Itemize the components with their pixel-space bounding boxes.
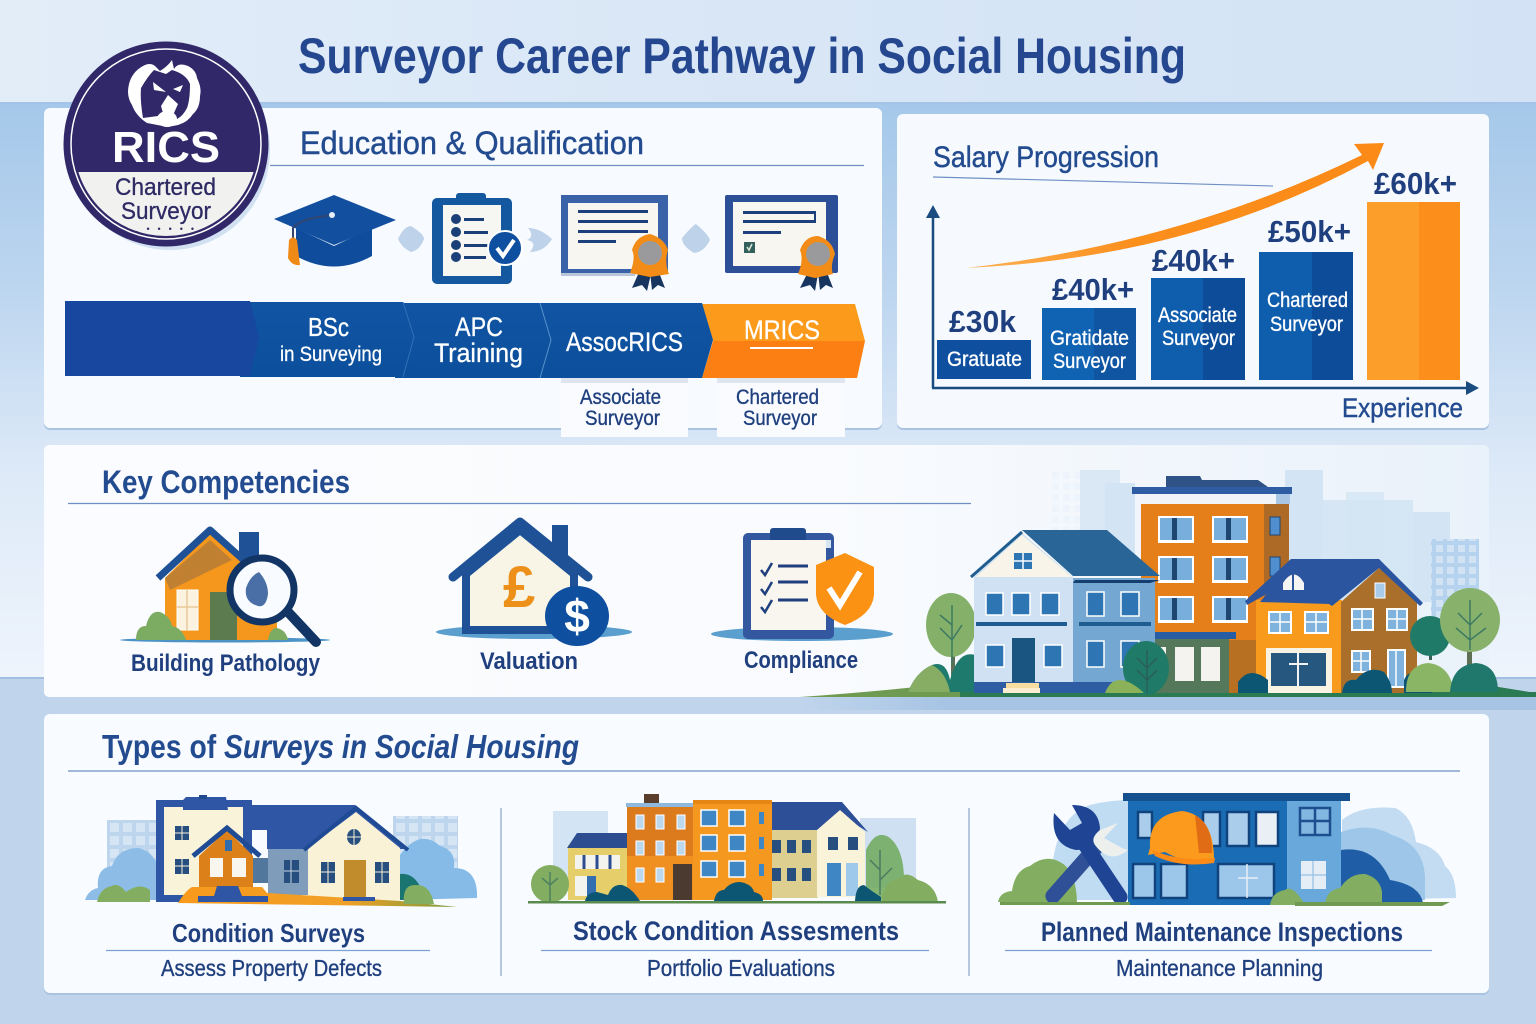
tag: chartered surveyor: Chartered: [736, 386, 819, 409]
badge name: RICS: [112, 123, 220, 172]
label: planned maintenance inspections: Planned Maintenance Inspections: [1041, 917, 1403, 947]
label: planned maintenance inspections: [1005, 917, 1432, 981]
scene: stock condition assessments: [528, 794, 946, 904]
bar: graduate surveyor: £40k+: [1052, 272, 1134, 307]
bar: graduate surveyor: [1042, 272, 1136, 380]
skyline: [1049, 470, 1479, 639]
label: condition surveys: Assess Property Defects: [161, 955, 382, 981]
tag: associate surveyor: Associate: [580, 386, 661, 409]
heading: types of surveys: Types of Surveys in Social Housing: [102, 728, 579, 765]
white and blue house: [971, 530, 1160, 693]
scene: planned maintenance inspections: [998, 793, 1456, 906]
icon: arrow 3: [682, 224, 710, 253]
step: APC training: APC: [455, 312, 503, 342]
panel: education and qualification: [44, 108, 882, 437]
axis label: Experience: [1342, 393, 1463, 423]
step: APC training: Training: [434, 338, 523, 368]
badge subtitle: [115, 174, 216, 234]
badge subtitle: Chartered: [115, 174, 216, 201]
icon: compliance: [711, 528, 893, 641]
step: BSc: BSc: [308, 312, 349, 342]
panel: types of surveys: [44, 714, 1489, 995]
bar: 60k: [1367, 166, 1460, 380]
label: stock condition assessments: [541, 916, 929, 981]
scene: condition surveys: [85, 795, 477, 907]
bar: graduate: £30k: [949, 304, 1017, 339]
step: BSc: [280, 312, 382, 366]
tag: associate surveyor: Surveyor: [585, 407, 660, 430]
RICS badge: [60, 42, 272, 262]
label: stock condition assessments: Portfolio Evaluations: [647, 955, 835, 981]
bar: chartered surveyor: [1259, 214, 1353, 380]
tower block: [1132, 476, 1292, 693]
step: MRICS: MRICS: [744, 315, 820, 345]
chart axes: [926, 205, 1479, 395]
label: planned maintenance inspections: Maintenance Planning: [1116, 955, 1323, 981]
bar: graduate surveyor: Surveyor: [1053, 350, 1126, 373]
icon: valuation: £: [503, 555, 535, 620]
bar: associate surveyor: [1151, 243, 1245, 380]
icon: associate certificate: [561, 195, 669, 291]
icon: lion head: [128, 60, 201, 127]
badge subtitle: . • • • • •: [136, 224, 194, 234]
growth arrow: [966, 143, 1384, 268]
tag: chartered surveyor: Surveyor: [743, 407, 817, 430]
step: AssocRICS: AssocRICS: [566, 327, 683, 357]
tree: [1105, 641, 1169, 695]
bar: chartered surveyor: Chartered: [1267, 289, 1348, 312]
icon: chartered certificate: [725, 195, 838, 291]
bushes and trees: [1238, 588, 1500, 693]
icon: valuation: $: [564, 590, 590, 642]
heading: education and qualification: Education & Qualification: [300, 125, 644, 161]
pathway ribbon: [65, 301, 865, 378]
bar: associate surveyor: £40k+: [1152, 243, 1235, 278]
panel: salary progression: [897, 114, 1489, 430]
tree: [926, 593, 976, 685]
label: valuation: Valuation: [480, 648, 578, 675]
heading: key competencies: Key Competencies: [102, 464, 350, 500]
icon: arrow 2: [527, 228, 552, 252]
step: APC training: [434, 312, 523, 368]
bar: graduate surveyor: Gratidate: [1050, 327, 1129, 350]
label: compliance: Compliance: [744, 647, 858, 674]
title: Surveyor Career Pathway in Social Housing: [298, 28, 1186, 84]
icon: arrow 1: [398, 226, 424, 252]
bar: graduate: [937, 304, 1031, 379]
bar: chartered surveyor: Surveyor: [1270, 313, 1343, 336]
step: BSc: in Surveying: [280, 343, 382, 366]
bar: graduate: Gratuate: [947, 348, 1022, 371]
scene: social housing neighbourhood: [800, 470, 1536, 710]
icon: building pathology: [120, 530, 330, 642]
bar: associate surveyor: Associate: [1158, 304, 1237, 327]
bar: associate surveyor: Surveyor: [1162, 327, 1235, 350]
label: condition surveys: [106, 918, 430, 981]
bar: chartered surveyor: £50k+: [1268, 214, 1351, 249]
icon: graduation cap: [274, 195, 396, 266]
label: condition surveys: Condition Surveys: [172, 918, 365, 948]
label: stock condition assessments: Stock Condition Assesments: [573, 916, 899, 946]
label: building pathology: Building Pathology: [131, 650, 321, 677]
tag: chartered surveyor: [717, 378, 845, 437]
heading: salary progression: Salary Progression: [933, 141, 1159, 174]
icon: valuation: [436, 522, 632, 646]
bar: 60k: £60k+: [1374, 166, 1457, 201]
icon: checklist clipboard: [432, 193, 522, 284]
tag: associate surveyor: [561, 378, 688, 437]
orange family house: [1245, 559, 1423, 693]
panel: key competencies: [44, 445, 1489, 697]
badge subtitle: Surveyor: [121, 198, 211, 225]
